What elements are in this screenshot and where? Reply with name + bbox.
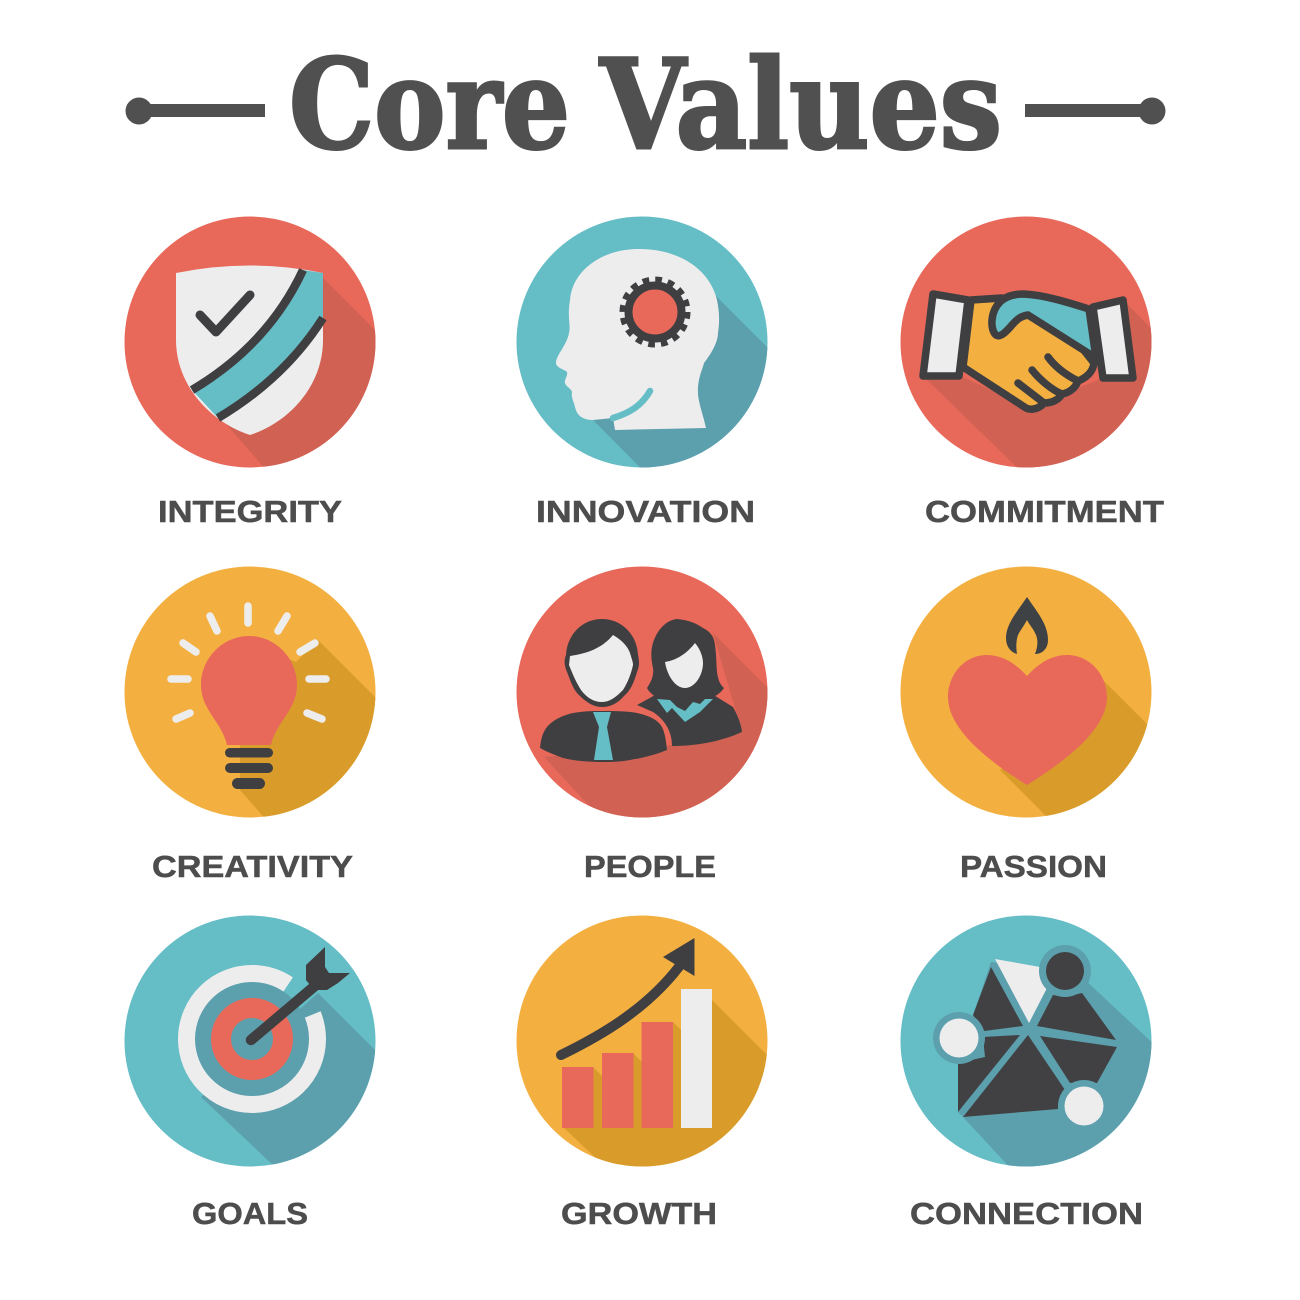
- panel: goals: [124, 916, 376, 1224]
- icon: yellow circle background: [124, 566, 376, 818]
- long shadow: [240, 640, 376, 817]
- panel: creativity: [124, 566, 376, 878]
- icon: arrow in target: [251, 947, 350, 1040]
- panel: integrity: [124, 216, 376, 522]
- long shadow: [564, 1000, 767, 1166]
- label: goals: GOALS: [192, 1196, 308, 1231]
- title: Values: [599, 33, 1002, 178]
- long shadow: [201, 993, 376, 1164]
- icon: head silhouette with gear: [556, 249, 719, 430]
- icon: light bulb: [201, 636, 297, 789]
- label: commitment: COMMITMENT: [925, 494, 1164, 529]
- icon: red circle background: [900, 216, 1152, 468]
- panel: growth: [516, 916, 768, 1224]
- panel: passion: [900, 566, 1170, 884]
- icon: flame: [1006, 597, 1048, 654]
- icon: connected network shape: [933, 945, 1117, 1132]
- title: [289, 33, 1002, 178]
- icon: handshake: [923, 294, 1133, 409]
- title ornament: left line with dot: [126, 98, 265, 124]
- icon: target: [167, 954, 337, 1124]
- icon: teal circle background: [124, 916, 376, 1166]
- label: passion: PASSION: [960, 849, 1107, 884]
- icon: yellow circle background: [516, 916, 768, 1166]
- icon: shield with check mark: [176, 266, 323, 435]
- label: creativity: CREATIVITY: [152, 849, 353, 884]
- label: growth: GROWTH: [561, 1196, 717, 1231]
- icon: man: [540, 619, 667, 762]
- label: connection: CONNECTION: [910, 1196, 1143, 1231]
- long shadow: [227, 278, 376, 467]
- panel: commitment: [900, 216, 1170, 529]
- arrow: rising trend: [561, 938, 694, 1055]
- icon: teal circle background: [516, 216, 768, 468]
- label: innovation: INNOVATION: [536, 494, 755, 529]
- panel: connection: [900, 916, 1160, 1231]
- icon: light rays: [171, 606, 326, 719]
- icon: heart: [948, 655, 1107, 785]
- title: Core: [289, 33, 570, 178]
- icon: woman: [637, 619, 742, 746]
- long shadow: [927, 304, 1152, 468]
- bar chart: [562, 989, 712, 1128]
- icon: teal circle background: [900, 916, 1152, 1166]
- label: integrity: INTEGRITY: [158, 494, 342, 529]
- icon: red circle background: [124, 216, 376, 468]
- label: people: PEOPLE: [584, 849, 716, 884]
- long shadow: [544, 634, 768, 818]
- title ornament: right line with dot: [1025, 98, 1166, 124]
- icon: red circle background: [516, 566, 768, 818]
- panel: innovation: [516, 216, 768, 522]
- panel: people: [516, 566, 768, 878]
- long shadow: [1000, 681, 1148, 816]
- long shadow: [963, 983, 1152, 1166]
- long shadow: [593, 296, 768, 468]
- icon: yellow circle background: [900, 566, 1152, 818]
